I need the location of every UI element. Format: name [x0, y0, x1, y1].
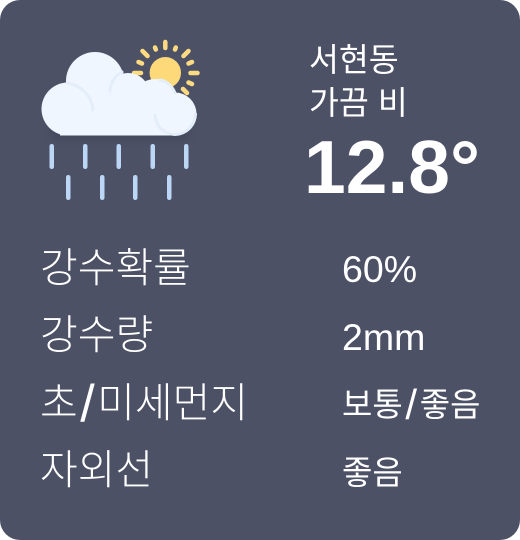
value: fine dust: 보통/좋음: [342, 381, 481, 428]
weather condition: 가끔 비: [309, 85, 408, 121]
label: UV: 자외선: [40, 447, 153, 493]
temperature: 12.8°: [304, 125, 480, 209]
value: precipitation probability: 60%: [342, 248, 417, 290]
label: fine dust: 초/미세먼지: [40, 375, 248, 433]
value: rainfall: 2mm: [342, 316, 425, 358]
icon: sun: [134, 42, 198, 93]
label: rainfall: 강수량: [40, 312, 153, 358]
location name: 서현동: [309, 42, 399, 78]
icon: cloud shadow: [50, 122, 190, 140]
icon: cloud with sun and rain: [42, 40, 200, 200]
icon: cloud: [42, 52, 196, 136]
value: UV: 좋음: [342, 454, 403, 491]
icon: rain drops: [50, 144, 188, 200]
label: precipitation probability: 강수확률: [40, 245, 191, 291]
